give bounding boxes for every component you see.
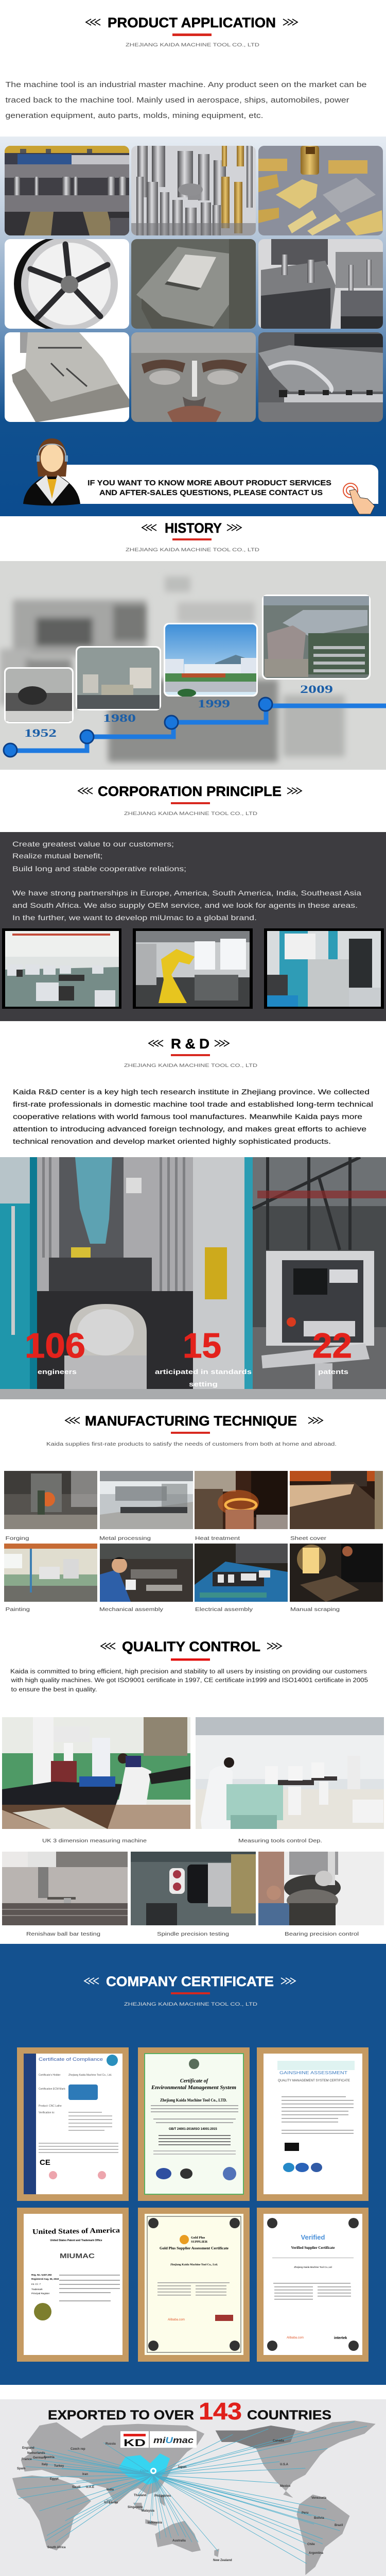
country labels: Chile	[307, 2543, 315, 2546]
certificate: compliance: Certificate's Holder:	[39, 2074, 61, 2077]
certificate: United States trademark: Registered Aug. 06, 2019	[31, 2278, 59, 2280]
photo: polished face mold	[131, 332, 256, 422]
icon: support agent with headset	[23, 438, 80, 506]
certificate: Gainshine assessment	[257, 2047, 369, 2201]
photo: heat treatment	[195, 1471, 288, 1529]
heading: manufacturing technique	[46, 1413, 337, 1447]
photo: 2009 factory aerial	[262, 595, 371, 680]
country labels: Argentina	[309, 2552, 324, 2555]
country labels: U.A.E	[86, 2486, 94, 2489]
photo: machined die plate	[5, 332, 129, 422]
certificate: verified supplier: intertek	[334, 2336, 347, 2340]
heading: exported to over 143 countries: COUNTRIES	[247, 2408, 331, 2422]
caption: bearing precision control: Bearing precision control	[285, 1931, 359, 1937]
photo: steel guide pillars	[131, 146, 256, 235]
text block: R and D description	[13, 1088, 373, 1145]
heading: R and D	[124, 1036, 258, 1068]
stat: 15 participated in standards setting	[155, 1326, 252, 1388]
certificate: verified supplier: Verified	[301, 2233, 325, 2241]
certificate: United States trademark: United States Patent and Trademark Office	[50, 2239, 102, 2242]
photo: mechanical assembly	[100, 1544, 193, 1602]
panel: product gallery on blue gradient	[0, 137, 386, 516]
certificate: compliance: Certification ECM Mark:	[39, 2088, 66, 2091]
country labels: Mexico	[280, 2485, 291, 2488]
label: painting: Painting	[5, 1606, 30, 1613]
certificate: environmental management system: GB/T 24001-2016/ISO 14001:2015	[169, 2128, 217, 2131]
certificate: gold plus supplier: SUPPLIER	[191, 2240, 207, 2244]
certificate: verified supplier: Alibaba.com	[287, 2336, 304, 2340]
certificate: compliance: Zhejiang Kaida Machine Tool Co., Ltd.	[68, 2074, 112, 2077]
stat: 22 patents: patents	[318, 1368, 348, 1376]
heading: manufacturing technique: Kaida supplies first-rate products to satisfy the needs of customers from both at home and abroad.	[46, 1441, 337, 1447]
contact text bar: AND AFTER-SALES QUESTIONS, PLEASE CONTACT US	[99, 488, 323, 497]
text block: principles: We have strong partnerships in Europe, America, South America, India, Southeast Asia	[12, 889, 361, 897]
label: heat treatment: Heat treatment	[195, 1535, 240, 1541]
country labels: South Africa	[47, 2546, 66, 2549]
photo: yellow robot	[133, 928, 253, 1009]
panel: machine photo with statistics	[0, 1157, 386, 1399]
country labels: Indonesia	[148, 2521, 163, 2524]
photo: injection mold parts	[258, 239, 383, 329]
country labels: China	[140, 2470, 149, 2473]
photo: electrical assembly	[195, 1544, 288, 1602]
heading: exported to over 143 countries: EXPORTED TO OVER	[48, 2408, 194, 2422]
heading: manufacturing technique: MANUFACTURING TECHNIQUE	[85, 1413, 297, 1429]
photo: CNC machine and control panel	[0, 1157, 386, 1399]
country labels: Canada	[273, 2439, 284, 2443]
caption: spindle precision testing: Spindle precision testing	[157, 1931, 229, 1937]
certificate: gold plus supplier: Gold Plus Supplier Assessment Certificate	[160, 2246, 229, 2250]
country labels: Russia	[106, 2443, 116, 2446]
text block: product application intro: traced back to the machine tool. Mainly used in aerospace, ships, automobiles, power	[5, 96, 349, 105]
certificate: compliance	[17, 2047, 129, 2201]
photo: metal processing	[100, 1471, 193, 1529]
label: sheet cover: Sheet cover	[290, 1535, 327, 1541]
photo: forging	[4, 1471, 97, 1529]
heading: exported to over 143 countries	[48, 2398, 331, 2425]
certificate: United States trademark: Trademark	[31, 2288, 43, 2291]
photo: bearing precision control	[258, 1852, 384, 1925]
certificate: United States trademark: United States of America	[32, 2227, 120, 2236]
photo: sheet forming mold	[131, 239, 256, 329]
text block: R and D description: technical renovation and develop market oriented highly sophisticated products.	[13, 1138, 331, 1145]
certificate: compliance: Certificate of Compliance	[39, 2057, 103, 2062]
text block: principles: Create greatest value to our customers;	[12, 840, 174, 848]
photo: manual scraping	[290, 1544, 383, 1602]
text block: R and D description: Kaida R&D center is a key high tech research institute in Zhejiang province. We collected	[13, 1088, 370, 1096]
photo: 1999 factory	[164, 623, 258, 697]
country labels: Philippines	[154, 2495, 171, 2498]
country labels: Bolivia	[314, 2517, 324, 2520]
heading: product application: ZHEJIANG KAIDA MACHINE TOOL CO., LTD	[126, 42, 260, 47]
country labels: Venezuela	[311, 2497, 327, 2500]
certificate: environmental management system: Environmental Management System	[151, 2085, 236, 2091]
photo: measuring tools lab	[196, 1717, 384, 1829]
country labels: Australia	[172, 2539, 186, 2543]
country labels: Austria	[44, 2456, 55, 2459]
heading: history	[126, 520, 260, 552]
country labels: Netherlands	[27, 2452, 45, 2455]
country labels: Malaysia	[142, 2510, 155, 2513]
certificate: Gainshine assessment: GAINSHINE ASSESSMENT	[279, 2070, 347, 2075]
country labels: Egypt	[50, 2478, 59, 2481]
label: forging: Forging	[5, 1535, 29, 1541]
country labels	[17, 2439, 343, 2562]
stat: 106 engineers: engineers	[38, 1368, 77, 1376]
photo: spindle precision testing	[131, 1852, 256, 1925]
country labels: India	[107, 2488, 114, 2492]
photo: 1952 factory	[4, 667, 74, 723]
heading: quality control: QUALITY CONTROL	[122, 1639, 260, 1654]
photo: automotive panel mold	[258, 332, 383, 422]
photo: stamping die in press	[5, 146, 129, 235]
photo: painting	[4, 1544, 97, 1602]
certificate: United States trademark: Int. Cl.: 7	[31, 2283, 41, 2285]
logo: KD and miUmac: KD	[124, 2438, 146, 2449]
photo: machine hall	[2, 928, 121, 1009]
logo: KD and miUmac	[120, 2431, 197, 2449]
panel: blurred lathe background	[0, 561, 386, 770]
China highlighted	[118, 2453, 170, 2485]
country labels: Germany	[33, 2456, 47, 2460]
text block: product application intro	[5, 80, 366, 120]
label: 1999: 1999	[198, 697, 230, 710]
country labels: Japan	[178, 2466, 187, 2469]
photo: Renishaw ball bar testing	[2, 1852, 128, 1925]
text block: principles	[12, 840, 361, 922]
certificate: gold plus supplier	[138, 2208, 250, 2362]
certificate: environmental management system: Zhejiang Kaida Machine Tool Co., LTD.	[160, 2098, 227, 2103]
heading: corporation principle: ZHEJIANG KAIDA MACHINE TOOL CO., LTD	[124, 811, 258, 816]
label: 1980: 1980	[103, 711, 136, 724]
text block: R and D description: attention to introducing advanced foreign technology, and makes great efforts to achieve	[13, 1125, 366, 1133]
contact text bar	[60, 465, 378, 504]
certificate: compliance: Verification to:	[39, 2111, 55, 2114]
section: R and D	[0, 1036, 386, 1399]
country labels: France	[22, 2458, 32, 2461]
section: history	[0, 520, 386, 770]
certificate: environmental management system: Certificate of	[180, 2078, 209, 2084]
certificate: gold plus supplier: Alibaba.com	[168, 2318, 185, 2321]
certificate: verified supplier: Zhejiang Kaida Machine Tool Co.,Ltd	[294, 2266, 332, 2268]
icon: hand clicking	[343, 483, 375, 514]
country labels: Peru	[302, 2512, 309, 2515]
label: 2009: 2009	[300, 683, 333, 696]
heading: product application	[86, 15, 297, 47]
country labels: Sri Lanka	[104, 2501, 118, 2504]
certificate: compliance: CE	[40, 2158, 50, 2167]
section: export world map	[0, 2399, 386, 2576]
section: manufacturing technique	[4, 1413, 383, 1613]
country labels: Spain	[17, 2467, 26, 2470]
heading: R and D: R & D	[171, 1036, 209, 1052]
caption: Renishaw ball bar testing: Renishaw ball bar testing	[26, 1931, 100, 1937]
section: company certificate	[0, 1944, 386, 2385]
photo: blue CNC machine	[264, 928, 384, 1009]
continents	[12, 2420, 376, 2575]
text block: product application intro: The machine tool is an industrial master machine. Any product seen on the market can be	[5, 80, 366, 89]
label: metal processing: Metal processing	[99, 1535, 151, 1541]
photo: CMM measuring machine	[2, 1717, 190, 1829]
heading: company certificate: COMPANY CERTIFICATE	[106, 1974, 274, 1989]
certificate: gold plus supplier: Gold Plus	[191, 2236, 205, 2240]
heading: corporation principle	[78, 784, 302, 816]
label: electrical assembly: Electrical assembly	[195, 1606, 253, 1613]
chart: world map with export routes	[12, 2420, 376, 2575]
text block: R and D description: first-rate professionals in domestic machine tool trade and established long-term technical	[13, 1100, 373, 1108]
icon: location pin on China	[150, 2468, 156, 2474]
label: manual scraping: Manual scraping	[290, 1606, 340, 1613]
stat: 15 participated in standards setting: articipated in standards	[155, 1368, 252, 1376]
photo: alloy wheel	[5, 236, 129, 331]
text block: quality statement	[10, 1669, 368, 1693]
country labels: Italy	[42, 2463, 48, 2466]
heading: product application: PRODUCT APPLICATION	[108, 15, 276, 30]
heading: company certificate: ZHEJIANG KAIDA MACHINE TOOL CO., LTD	[124, 2002, 258, 2007]
photo: brass wear plates	[258, 146, 383, 235]
timeline line with milestones	[4, 698, 386, 757]
certificate: United States trademark: Reg. No. 5,827,392	[31, 2274, 52, 2276]
country labels: Singapore	[128, 2506, 143, 2509]
certificate: environmental management system	[138, 2047, 250, 2201]
certificate: Gainshine assessment: QUALITY MANAGEMENT SYSTEM CERTIFICATE	[278, 2079, 350, 2082]
photo: sheet cover	[290, 1471, 383, 1529]
text block: principles: and South Africa. We also supply OEM service, and we look for agents in these areas.	[12, 901, 358, 909]
photo: 1980 factory	[76, 646, 161, 710]
heading: corporation principle: CORPORATION PRINCIPLE	[98, 784, 282, 799]
heading: history: HISTORY	[165, 520, 222, 536]
heading: quality control	[101, 1639, 282, 1661]
certificate: gold plus supplier: Zhejiang Kaida Machine Tool Co., Ltd.	[170, 2263, 218, 2266]
stat: 15 participated in standards setting: 15	[183, 1326, 221, 1365]
heading: history: ZHEJIANG KAIDA MACHINE TOOL CO., LTD	[126, 547, 260, 552]
heading: R and D: ZHEJIANG KAIDA MACHINE TOOL CO., LTD	[124, 1063, 258, 1068]
export route lines	[17, 2421, 367, 2564]
certificate: United States trademark: Principal Register	[31, 2292, 50, 2295]
text block: principles: Build long and stable cooperative relations;	[12, 865, 186, 873]
section: quality control	[2, 1639, 384, 1937]
stat: 22 patents: 22	[312, 1326, 352, 1365]
country labels: New Zealand	[213, 2559, 232, 2562]
text block: principles: In the further, we want to develop miUmac to a global brand.	[12, 913, 257, 922]
contact text bar: IF YOU WANT TO KNOW MORE ABOUT PRODUCT SERVICES	[87, 479, 331, 487]
country labels: Czech rep	[71, 2448, 85, 2451]
text block: quality statement: with high quality machines. We got ISO9001 certificate in 1997, CE certificate in1999 and ISO14001 certificate in 2005	[10, 1677, 368, 1684]
stat: 15 participated in standards setting: setting	[189, 1381, 218, 1388]
certificate: compliance: Product: CNC Lathe	[39, 2105, 62, 2108]
label: mechanical assembly: Mechanical assembly	[99, 1606, 164, 1613]
text block: principles: Realize mutual benefit;	[12, 852, 103, 860]
panel background	[0, 1944, 386, 2385]
certificate: United States trademark: MIUMAC	[60, 2252, 95, 2260]
country labels: England	[22, 2447, 34, 2450]
stat: 106 engineers: 106	[25, 1326, 85, 1365]
section: product application	[0, 15, 386, 516]
banner: contact prompt	[23, 438, 378, 514]
caption: measuring tools control: Measuring tools control Dep.	[238, 1838, 322, 1844]
caption: UK 3 dimension measuring machine: UK 3 dimension measuring machine	[42, 1838, 147, 1844]
map background	[0, 2399, 386, 2576]
heading: company certificate	[84, 1974, 295, 2007]
panel: principles on dark background	[0, 832, 386, 1021]
logo: KD and miUmac: miUmac	[153, 2435, 194, 2445]
certificate: United States trademark	[17, 2208, 129, 2362]
certificate: verified supplier	[257, 2208, 369, 2362]
text block: R and D description: cooperative relations with world famous tool manufactures. Meanwhile Kaida pays more	[13, 1113, 362, 1121]
certificate: verified supplier: Verified Supplier Certificate	[291, 2246, 335, 2250]
country labels: U.S.A	[280, 2463, 289, 2466]
text block: quality statement: Kaida is committed to bring efficient, high precision and stability to all users by insisting on providing our customers	[10, 1669, 367, 1675]
country labels: Thailand	[134, 2494, 147, 2497]
country labels: Turkey	[54, 2465, 64, 2468]
country labels: Saudi	[72, 2486, 81, 2489]
country labels: Iran	[82, 2473, 88, 2476]
section: corporation principle	[0, 784, 386, 1021]
text block: quality statement: to ensure the best in quality.	[11, 1687, 97, 1693]
country labels: Brazil	[335, 2524, 343, 2527]
text block: product application intro: generation equipment, auto parts, molds, mining equipment, etc.	[5, 111, 264, 120]
label: 1952: 1952	[24, 726, 57, 739]
